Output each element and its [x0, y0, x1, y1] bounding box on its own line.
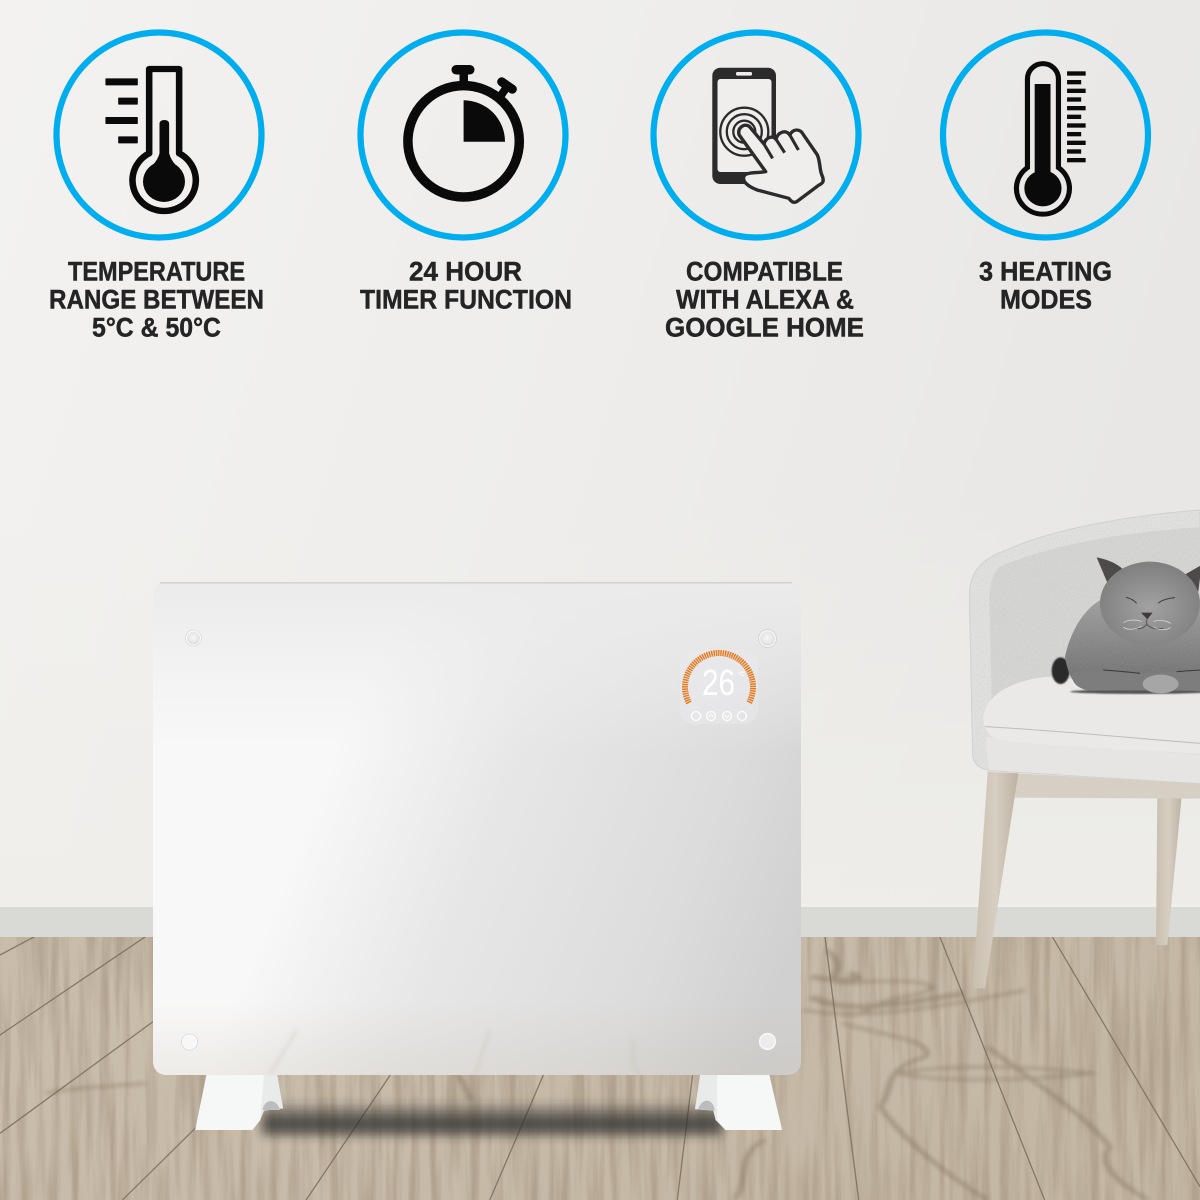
left foot — [195, 1074, 283, 1130]
feature 4: heating modes — [943, 32, 1148, 314]
label: RANGE BETWEEN — [49, 284, 264, 314]
cat contact shadow — [1070, 689, 1200, 694]
label: WITH ALEXA & — [676, 284, 854, 314]
label — [979, 256, 1112, 314]
label — [665, 256, 864, 342]
cat paw — [1143, 675, 1179, 693]
mounting knob top left — [186, 630, 202, 646]
cat front legs — [1072, 671, 1200, 691]
blue ring — [654, 32, 858, 238]
rear chair leg — [1156, 797, 1182, 945]
cat body — [1065, 598, 1200, 691]
hand — [739, 125, 823, 202]
cat head — [1100, 562, 1200, 645]
feature 1: temperature range — [49, 32, 264, 342]
mounting knob bottom right — [758, 1032, 776, 1050]
armchair — [969, 510, 1200, 988]
cat nose — [1141, 613, 1153, 619]
blue ring — [943, 32, 1148, 238]
blue ring — [56, 32, 262, 238]
temperature reading: 26 — [702, 662, 735, 703]
chair inner back — [989, 527, 1200, 700]
degree symbol: °C — [738, 672, 745, 678]
label — [49, 256, 264, 342]
wooden floor — [0, 936, 1200, 1200]
icon: stopwatch — [408, 65, 519, 197]
label: MODES — [1000, 284, 1092, 314]
mounting knob bottom left — [182, 1034, 198, 1050]
panel reflection streaks — [270, 1030, 640, 1074]
phone — [712, 68, 776, 184]
heater feet — [195, 1074, 782, 1130]
feature 2: timer — [360, 32, 572, 314]
label: 5°C & 50°C — [92, 312, 221, 342]
touch rings — [720, 108, 768, 156]
mounting knob top right — [758, 630, 776, 648]
seat cushion — [983, 677, 1200, 754]
cat face — [1123, 597, 1175, 630]
cat ears — [1097, 557, 1125, 585]
feature 3: smart home compatibility — [654, 32, 864, 342]
label — [360, 256, 572, 314]
glass panel heater — [153, 582, 801, 1075]
heater floor shadow — [262, 1100, 722, 1140]
icon: thermometer with gauge — [1016, 64, 1086, 214]
cat — [1052, 557, 1200, 694]
icon: thermometer with scale marks — [105, 69, 196, 211]
icon: phone and tapping hand — [712, 68, 823, 202]
right foot — [695, 1074, 782, 1130]
chair front band — [986, 737, 1200, 783]
label: 24 HOUR — [409, 256, 522, 286]
label: TEMPERATURE — [68, 256, 245, 286]
label: GOOGLE HOME — [665, 312, 864, 342]
thermostat control display — [680, 650, 758, 724]
temperature dial — [685, 653, 753, 703]
chair shell — [969, 510, 1200, 783]
touch buttons — [692, 712, 746, 720]
skirting board — [0, 904, 1200, 937]
label: TIMER FUNCTION — [360, 284, 572, 314]
label: 3 HEATING — [979, 256, 1112, 286]
front chair leg — [973, 772, 1018, 988]
cat tail — [1052, 657, 1070, 684]
wood grain figure — [46, 950, 1148, 1200]
blue ring — [360, 32, 566, 238]
wooden seat rail — [1015, 773, 1200, 799]
label: COMPATIBLE — [686, 256, 843, 286]
room background: wall — [0, 0, 1200, 940]
